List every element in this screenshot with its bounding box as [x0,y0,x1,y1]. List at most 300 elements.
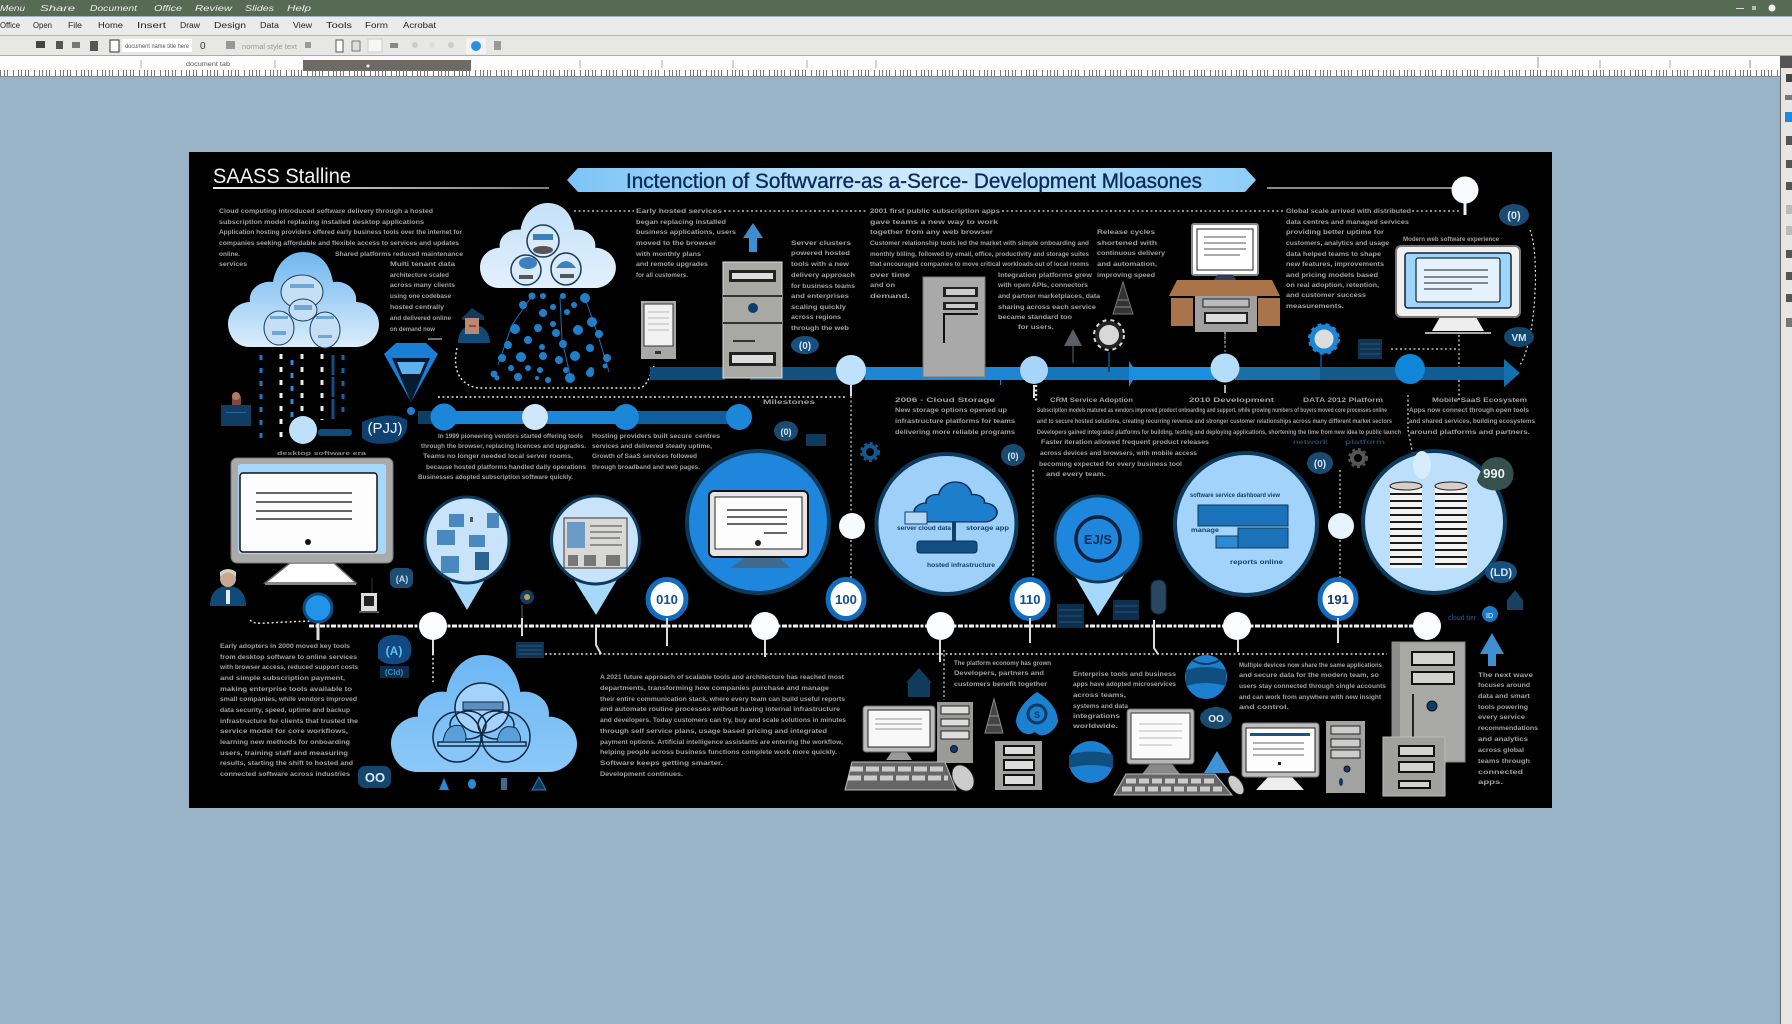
badge: small left: (A) [396,574,408,584]
icon: globe lower [1069,741,1113,783]
text block: far right: The next wave [1478,672,1533,679]
text block: lower middle: and developers. Today customers can try, buy and scale solutions in minutes [600,717,846,724]
text block: cloud note: Multi tenant data [390,261,455,268]
text block: tech note: apps have adopted microservices [1073,681,1176,688]
badge: bottom left [358,766,391,788]
small right-side icons: ID [1486,613,1493,620]
text block: beside server: Integration platforms grew [998,272,1093,279]
text block: server note [791,240,855,332]
badge: monitor two [1200,707,1232,729]
small gear dark [861,443,879,461]
text block: far right: data and smart [1478,693,1531,700]
timeline stems [433,610,1338,662]
text block: cloud note: across many clients [390,282,455,289]
circle: cloud database: hosted infrastructure [927,562,995,569]
badge: dark centre [774,421,798,441]
text block: mobile: around platforms and partners. [1410,429,1530,436]
text block: lower left: connected software across industries [220,771,350,778]
icon: desk with monitor [1169,224,1280,352]
toolbar: document name title here [125,44,190,50]
badge: near server: (0) [799,341,811,352]
timeline node 4 [1395,354,1425,384]
banner heading: Inctenction of Softwvarre-as a-Serce- Development Mloasones [626,170,1202,193]
menu bar: Data [260,21,280,30]
badge: small left [390,568,413,588]
text block: small column: Release cycles [1097,229,1155,236]
text block: cloud note: architecture scaled [390,272,449,279]
icon: pyramid grey [985,699,1003,733]
icon: big monitor left [231,458,393,585]
cloud icon: left [228,252,379,348]
text block: top centre left: for all customers. [636,272,688,279]
menu bar: Form [365,21,388,30]
icon: tower three [1326,721,1365,793]
text block: upper right: and customer success [1286,292,1366,299]
icon: small terminal [359,578,379,613]
text block: wide middle: Subscription models matured as vendors improved product onboarding and support, while growing numbers of buyers moved core processes online [1037,407,1387,414]
text block: server note: through the web [791,325,849,332]
circle: cloud database: server cloud data [897,525,951,532]
badge: top right [1499,204,1529,226]
dotted main lower timeline [309,610,1441,662]
badge circle: 191 [1320,580,1356,618]
text block: server note: Server clusters [791,240,851,247]
text block: cloud note: and delivered online [390,315,451,322]
icon: blue triangle [1204,751,1230,773]
pin: blue saas [1055,496,1141,616]
text block: lower left: from desktop software to online services [220,654,357,661]
menu bar: Draw [180,21,200,30]
badge: monitor two: OO [1208,714,1224,725]
text block: lower centre one: In 1999 pioneering vendors started offering tools [438,433,583,440]
text block: lower left: Early adopters in 2000 moved key tools [220,643,350,650]
text block: top centre left: and remote upgrades [636,261,708,268]
circle: database stacks [1363,451,1505,593]
menu bar: Home [98,21,124,30]
text block: upper right: providing better uptime for [1286,229,1385,236]
text block: far right: teams through [1478,758,1530,765]
text block: bottom right: users stay connected through single accounts [1239,683,1386,690]
badge: 990 [1477,457,1514,490]
badge: bottom right of stacks: (LD) [1490,567,1512,579]
badge: upper of circle two [1001,444,1025,466]
text block: milestone middle: 2001 first public subscription apps [870,208,1000,215]
badge: near server [791,336,819,354]
timeline node 2 [1020,356,1048,398]
text block: bottom right: Multiple devices now share the same applications [1239,662,1382,669]
icon: gear blue [1309,324,1339,367]
text block: far right: tools powering [1478,704,1528,711]
text headings row under timeline [763,397,1527,406]
icons under cloud [439,777,546,790]
text block: cloud storage: infrastructure platforms for teams [895,418,1015,425]
text block: small column [1097,229,1165,279]
ruler [0,56,1780,77]
text block: top centre left: began replacing installed [636,219,726,226]
timeline node A [419,612,447,640]
text block: wide middle: becoming expected for every business tool [1039,461,1182,468]
text block: small column: continuous delivery [1097,250,1165,257]
text block: lower centre two: Hosting providers built secure [592,433,692,440]
text block: server note: powered hosted [791,250,850,257]
text block: server note: scaling quickly [791,304,846,311]
icon: server tower one [723,262,782,378]
badge: top right: (0) [1507,210,1521,222]
timeline node C [926,612,954,640]
small dark labels [1293,439,1385,446]
badge circle: 100: 100 [835,592,857,607]
text block: lower centre one: through the browser, replacing licences and upgrades. [421,443,586,450]
text block: lower middle: departments, transforming how companies purchase and manage [600,685,829,692]
data dot network [490,292,611,383]
text block: server note: for business teams [791,283,855,290]
text block: lower left: with browser access, reduced support costs [219,664,358,671]
badge: bottom right of stacks [1485,561,1517,583]
toolbar: normal style text [242,44,297,51]
text block: small column: improving speed [1097,272,1155,279]
text block: upper right: and pricing models based [1286,272,1378,279]
menu bar: Office [0,21,21,30]
application title bar: Document [90,4,138,13]
small right-side icons: cloud tier [1448,615,1476,622]
panel: infographic board [189,152,1552,808]
text block: small column: and automation, [1097,261,1157,268]
text block: lower centre one: Businesses adopted subscription software quickly. [418,474,573,481]
badge circle: 100 [828,580,864,618]
text block: milestone middle [870,208,1089,300]
label above right monitor: Modern web software experience [1403,236,1499,243]
text block: intro: services [219,261,247,268]
text block: intro [219,208,463,268]
text block: tech note [1072,671,1176,730]
text block: lower middle: Software keeps getting smarter. [600,760,723,767]
menu bar: Open [33,21,52,30]
ruler: document tab [186,62,231,68]
application title bar: Share [40,4,76,13]
badge: blue label [380,666,409,678]
circle: cloud database: storage app [966,525,1009,532]
application title bar: Slides [245,4,274,13]
cloud icon: centre top [480,203,616,288]
icon: tablet device [641,301,676,359]
badge: 990: 990 [1483,466,1505,481]
text block: wide middle: across devices and browsers, with mobile access [1040,450,1197,457]
icon: older person [210,569,246,606]
badge circle: 010 [648,580,686,618]
text block: lower left: and simple subscription payment, [220,675,345,682]
text block: wide middle: and to secure hosted solutions, creating recurring revenue and stronger customer relationships across many different market sectors [1037,418,1392,425]
text block: top centre left: Early hosted services [636,208,722,215]
icon: warning triangle [1064,329,1082,363]
small data chip [806,434,826,446]
icon: desktop computer one [845,702,979,795]
title: SAASS Stalline [213,165,351,188]
text block: lower left: results, starting the shift to hosted and [220,760,353,767]
icon: front tower [1383,737,1445,796]
big circle: monitor [687,451,829,593]
small right-side icons [1448,590,1523,622]
icon: server tower two [923,277,985,377]
badge: blue shield: (A) [386,644,402,658]
text block: milestone middle: monthly billing, followed by email, office, productivity and storage suites [870,251,1089,258]
header end marker [1267,176,1478,215]
badge: dark centre: (0) [780,427,792,437]
icon: big monitor right [1396,246,1520,334]
text block: lower middle: payment options. Artificial intelligence assistants are entering the workflow, [600,739,843,746]
rain of data lines [261,354,343,442]
badge: timeline right [1504,327,1534,347]
text block: lower middle: through self service plans, usage based pricing and integrated [600,728,827,735]
cloud icon: bottom [391,655,577,772]
text block: lower left: users, training staff and measuring [220,750,348,757]
icon: big tower [1392,642,1465,762]
menu bar: Design [214,21,246,30]
text block: milestone middle: demand. [870,293,910,300]
icon: up arrow [743,223,763,252]
small lamp icon [520,590,534,618]
text block: upper right: measurements. [1286,303,1344,310]
text headings row under timeline: DATA 2012 Platform [1303,397,1383,404]
text block: near first desktop: Developers, partners and [954,670,1044,677]
circle: browser panels: manage [1191,527,1219,534]
icon: building figure [221,392,251,426]
timeline node B [751,612,779,640]
text block: milestone middle: over time [870,272,911,279]
text block: cloud note: on demand now [390,326,436,333]
icon: small tower [995,741,1042,790]
text block: bottom right: and control. [1239,704,1289,711]
text block: lower left: data security, speed, uptime and backup [220,707,350,714]
timeline node 1 [836,355,866,396]
text block: intro: Shared platforms reduced maintenance [335,251,463,258]
icon: desktop computer two [1114,709,1247,797]
white node on upper dashed line [1328,513,1354,539]
badge circle: 110 [1012,580,1048,618]
text block: intro: Cloud computing introduced software delivery through a hosted [219,208,433,215]
text block: milestone middle: together from any web browser [870,229,994,236]
circle: browser panels [1175,453,1317,595]
text block: lower left: making enterprise tools available to [220,686,352,693]
text block: bottom right: and secure data for the modern team, so [1239,672,1379,679]
text block: mobile: and shared services, building ecosystems [1409,418,1535,425]
pin: blue saas: EJ/S [1084,532,1112,547]
text block: cloud note: using one codebase [390,293,451,300]
badge: blue shield [378,635,411,664]
text block: far right: and analytics [1478,736,1528,743]
text headings row under timeline: Milestones [763,399,816,406]
icon: microphone capsule [1151,580,1166,614]
menu bar: Acrobat [403,21,437,30]
timeline node E [1413,612,1441,640]
icon: person [458,308,490,343]
text block: mobile: Apps now connect through open tools [1409,407,1529,414]
text block: bottom right [1239,662,1386,711]
icon: blue blob badge: S [1034,710,1040,720]
menu bar [0,17,1792,36]
text block: beside server: and partner marketplaces, data [998,293,1100,300]
text block: tech note: worldwide. [1072,723,1118,730]
text block: upper right: Global scale arrived with distributed [1286,208,1411,215]
text block: cloud note [390,261,455,333]
small dark labels: platform [1345,439,1385,446]
text block: lower centre two [592,433,720,471]
text block: far right [1478,672,1538,786]
badge: timeline right: VM [1512,333,1526,344]
text headings row under timeline: Mobile SaaS Ecosystem [1432,397,1527,404]
dotted guide lines [250,211,1535,700]
gear gray [1349,449,1367,467]
text block: lower left: service model for core workflows, [220,728,348,735]
text block: beside server [997,272,1100,331]
badge circle: 010: 010 [656,592,678,607]
text block: lower left: infrastructure for clients that trusted the [220,718,358,725]
badge: blue label: (Cld) [385,668,403,677]
icon: small pyramid [1113,282,1133,314]
badge: code: (PJJ) [368,420,402,437]
badge: bottom left: OO [365,770,385,785]
application title bar: Help [287,4,312,13]
text block: wide middle: and every team. [1046,471,1106,478]
menu bar: View [293,21,312,30]
text block: small column: shortened with [1097,240,1157,247]
timeline start node [289,416,352,444]
text block: tech note: systems and data [1073,703,1128,710]
badge: code [362,415,407,444]
text block: upper right: new features, improvements [1286,261,1384,268]
text block: top centre left: business applications, users [636,229,736,236]
text block: near first desktop: The platform economy has grown [954,660,1051,667]
text block: wide middle: Developers gained integrated platforms for building, testing and deploying applications, shortening the time from new idea to public launch [1037,429,1401,436]
text block: near first desktop [954,660,1051,688]
text block: lower left [219,643,358,778]
icon: gear white [1094,320,1124,372]
text block: lower middle [600,674,846,778]
data block near timeline [516,642,544,658]
text block: upper right [1286,208,1411,310]
icon: dark house [906,668,932,697]
text block: beside server: for users. [1018,324,1054,331]
pin: document [552,496,640,615]
text block: wide middle: Faster iteration allowed frequent product releases [1041,439,1209,446]
text block: top centre left [635,208,736,279]
text block: beside server: with open APIs, connectors [997,282,1088,289]
badge circle: 191: 191 [1327,592,1349,607]
text block: lower left: small companies, while vendors improved [220,696,357,703]
text block: far right: focuses around [1478,682,1530,689]
text headings row under timeline: 2010 Development [1189,397,1275,404]
application title bar: Menu [0,4,26,13]
data block: small [1358,339,1382,359]
icon: globe upper [1185,655,1227,699]
blue pin start [304,594,332,640]
circle: cloud database [876,454,1016,594]
text block: milestone middle: and on [870,282,895,289]
text block: tech note: Enterprise tools and business [1073,671,1176,678]
text block: intro: companies seeking affordable and flexible access to services and updates [219,240,459,247]
text block: intro: subscription model replacing installed desktop applications [219,219,424,226]
text block: far right: recommendations [1478,725,1538,732]
badge circle: 110: 110 [1020,592,1040,607]
text block: milestone middle: Customer relationship tools led the market with simple onboarding and [870,240,1089,247]
text block: server note: tools with a new [791,261,850,268]
middle progress bar [418,404,752,430]
text headings row under timeline: 2006 - Cloud Storage [895,397,996,404]
text block: lower centre two: through broadband and web pages. [592,464,700,471]
text block: wide middle [1037,407,1401,478]
text block: lower centre one: because hosted platforms handled daily operations [426,464,586,471]
text block: lower centre one: Teams no longer needed local server rooms, [423,453,573,460]
circle: browser panels: software service dashboard view [1190,492,1281,499]
text block: upper right: customers, analytics and usage [1286,240,1389,247]
upper timeline bar [650,354,1520,398]
text block: cloud storage: delivering more reliable programs [895,429,1015,436]
text block: tech note: across teams, [1073,692,1126,699]
text block: beside server: became standard too [998,314,1072,321]
text block: lower centre two: Growth of SaaS services followed [592,453,697,460]
text block: upper right: data centres and managed services [1286,219,1409,226]
text block: far right: across global [1478,747,1524,754]
text block: cloud storage [895,407,1015,436]
icon: arrow up right [1480,633,1504,666]
text block: lower centre two: centres [695,433,720,440]
text block: far right: connected [1478,769,1523,776]
text block: far right: every service [1478,714,1525,721]
text block: cloud note: hosted centrally [390,304,444,311]
small dark labels: network [1293,439,1329,446]
menu bar: File [68,21,83,30]
menu bar: Insert [137,21,167,30]
icon: diamond gem [384,339,442,415]
text block: top centre left: moved to the browser [636,240,717,247]
text block: lower middle: helping people across business functions complete work more quickly. [600,749,837,756]
circle: browser panels: reports online [1230,559,1283,566]
text block: tech note: integrations [1073,713,1120,720]
text block: near first desktop: customers benefit together [954,681,1048,688]
icon: blue blob badge [1016,692,1058,735]
text block: intro: Application hosting providers offered early business tools over the internet for [219,229,462,236]
application title bar: Office [154,4,183,13]
text block: far right: apps. [1478,779,1503,786]
text block: upper right: data helped teams to shape [1286,251,1381,258]
text block: lower middle: Development continues. [600,771,683,778]
text headings row under timeline: CRM Service Adoption [1050,397,1133,404]
label above left monitor: desktop software era [277,451,366,457]
text block: top centre left: with monthly plans [635,251,701,258]
application title bar: Review [195,4,234,13]
text block: milestone middle: gave teams a new way to work [870,219,999,226]
toolbar: 0 [200,41,206,52]
small data blocks around pin [1057,600,1139,628]
timeline node D [1223,612,1251,640]
badge: near gear: (0) [1314,459,1326,470]
text block: bottom right: and can work from anywhere with new insight [1239,694,1382,701]
text block: server note: and enterprises [791,293,849,300]
text block: beside server: sharing across each service [998,304,1096,311]
badge: near gear [1307,452,1333,474]
node: white circle [839,513,865,539]
text block: lower left: learning new methods for onboarding [220,739,350,746]
text block: cloud storage: New storage options opened up [895,407,1007,414]
right sidebar [1780,56,1792,1024]
text block: server note: delivery approach [791,272,855,279]
icon: desktop computer three [1242,723,1319,790]
application title bar [0,0,1792,16]
text block: lower middle: their entire communication stack, where every team can build useful reports [600,696,845,703]
timeline node 3 [1210,354,1240,393]
text block: server note: across regions [791,314,841,321]
text block: intro: online. [219,251,240,258]
menu bar: Tools [326,21,352,30]
